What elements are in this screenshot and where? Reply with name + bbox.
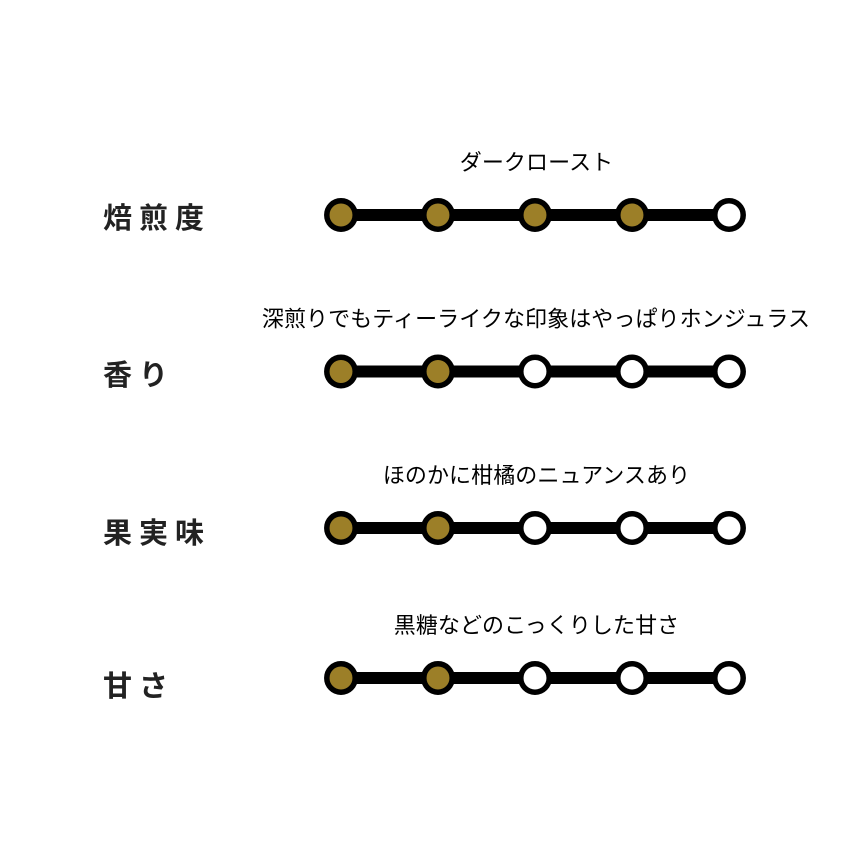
row: fruitiness (103, 463, 743, 550)
rating scale: 4 of 5 (327, 201, 743, 229)
row: aroma (103, 306, 810, 392)
label: sweetness: 甘さ (103, 670, 175, 703)
rating scale: 2 of 5 (327, 357, 743, 386)
caption: fruitiness note: ほのかに柑橘のニュアンスあり (383, 463, 690, 488)
caption: aroma note: 深煎りでもティーライクな印象はやっぱりホンジュラス (262, 306, 810, 332)
rating scale: 2 of 5 (327, 664, 743, 692)
caption: dark roast: ダークロースト (460, 150, 613, 175)
label: roast level: 焙煎度 (103, 202, 211, 235)
label: aroma: 香り (103, 359, 175, 392)
rating scale: 2 of 5 (327, 514, 743, 542)
row: sweetness (103, 613, 743, 703)
caption: sweetness note: 黒糖などのこっくりした甘さ (394, 613, 679, 638)
row: roast level (103, 150, 743, 235)
label: fruitiness: 果実味 (103, 517, 211, 550)
